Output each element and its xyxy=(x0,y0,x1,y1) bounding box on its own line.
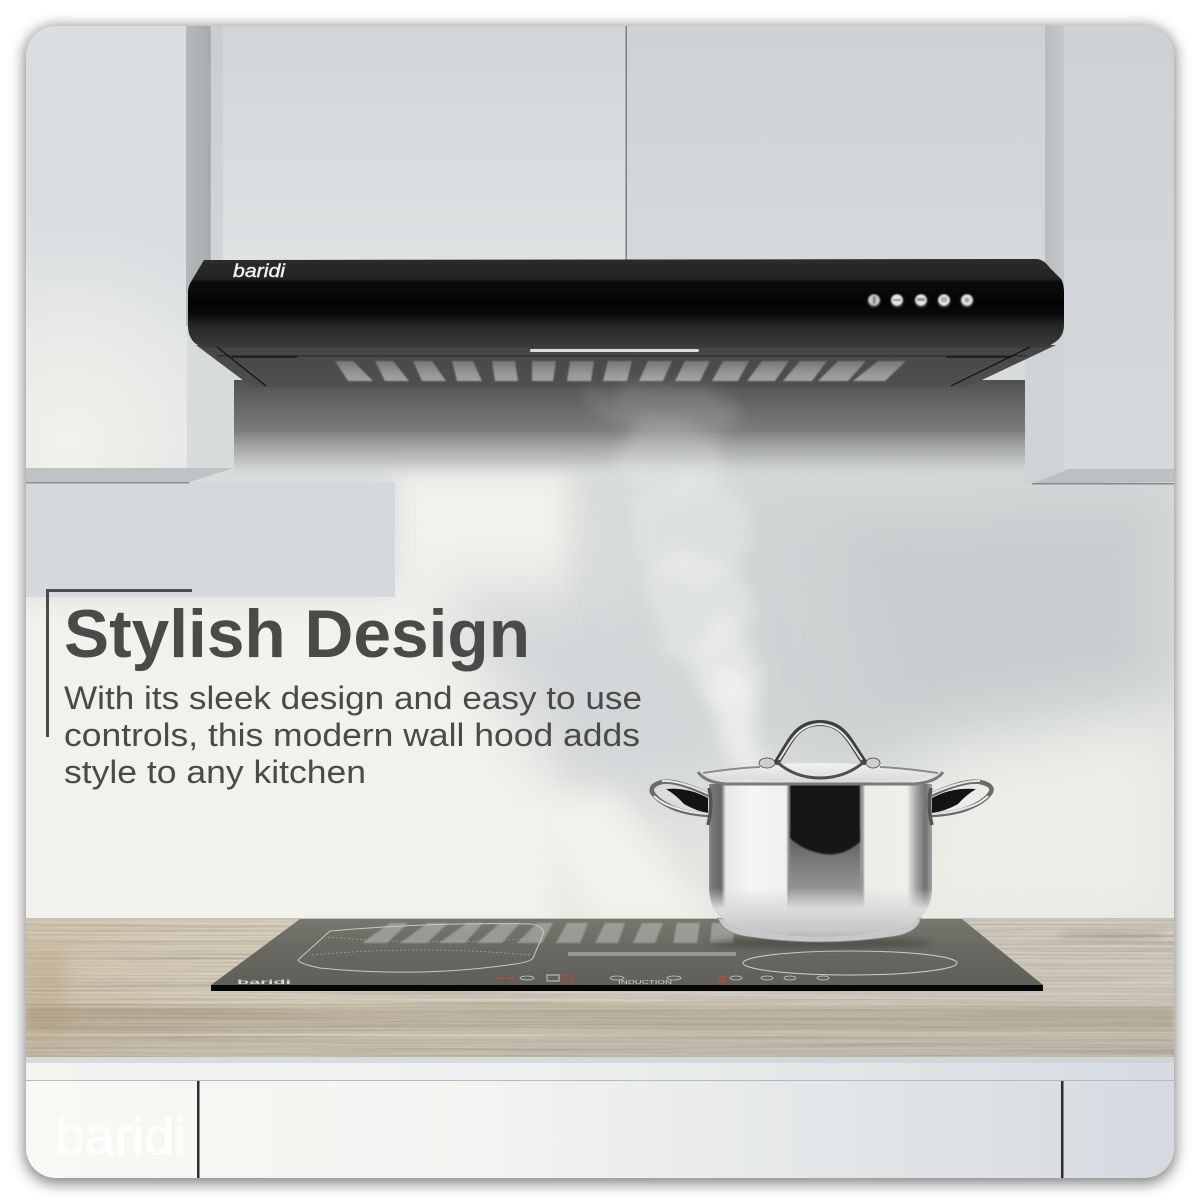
hood underside xyxy=(196,345,1056,387)
wall xyxy=(26,360,1174,918)
hood light strip xyxy=(530,349,699,352)
hotplate outline left xyxy=(298,924,544,972)
drawer watermark logo: baridi xyxy=(55,1108,186,1166)
cooktop induction label: INDUCTION xyxy=(618,980,673,986)
centre wall cabinets xyxy=(211,26,1045,266)
right upper cabinet xyxy=(1025,26,1174,484)
glass surface xyxy=(211,919,1043,985)
description: controls, this modern wall hood adds xyxy=(64,717,640,753)
pot side rivet plates xyxy=(708,788,932,825)
pot base xyxy=(718,918,921,942)
reflected vents xyxy=(362,923,735,943)
dark centre reflection xyxy=(790,784,860,854)
worktop xyxy=(26,918,1174,1058)
left side handle xyxy=(652,781,709,815)
light reflection strip xyxy=(568,952,736,956)
base cabinets and drawers xyxy=(26,1057,1174,1179)
control buttons xyxy=(867,294,974,308)
steam xyxy=(595,385,773,790)
description: With its sleek design and easy to use xyxy=(64,680,642,716)
cooking pot xyxy=(652,723,992,950)
hood small latch marks xyxy=(232,356,1012,358)
grey lower reflection xyxy=(790,830,860,886)
pot shadow xyxy=(708,937,932,949)
description: style to any kitchen xyxy=(64,754,366,790)
text block xyxy=(48,590,642,790)
touch controls xyxy=(498,975,829,982)
left upper cabinet xyxy=(26,26,234,484)
right side handle xyxy=(931,781,992,815)
hood canopy xyxy=(188,259,1064,348)
hood shadow on wall xyxy=(234,380,1026,480)
lid rim xyxy=(698,772,943,784)
lid highlight xyxy=(703,767,938,773)
pot lower shine xyxy=(710,890,932,936)
heading: Stylish Design xyxy=(64,596,530,672)
corner bracket xyxy=(48,590,192,737)
hood logo: baridi xyxy=(233,261,286,281)
lid handle xyxy=(777,723,864,778)
front edge xyxy=(211,985,1043,991)
lid rivets xyxy=(759,758,880,768)
hood front seam xyxy=(217,355,1027,356)
vent slots xyxy=(335,361,906,381)
pot body xyxy=(709,784,932,936)
induction cooktop xyxy=(211,919,1043,991)
hood side lines xyxy=(217,347,1030,386)
glass lid xyxy=(698,763,943,782)
range hood xyxy=(188,259,1064,387)
cooktop brand: baridi xyxy=(237,979,292,986)
hotplate outline right xyxy=(743,951,957,975)
hotplate inner dashed lines xyxy=(312,937,540,955)
description xyxy=(64,680,642,790)
